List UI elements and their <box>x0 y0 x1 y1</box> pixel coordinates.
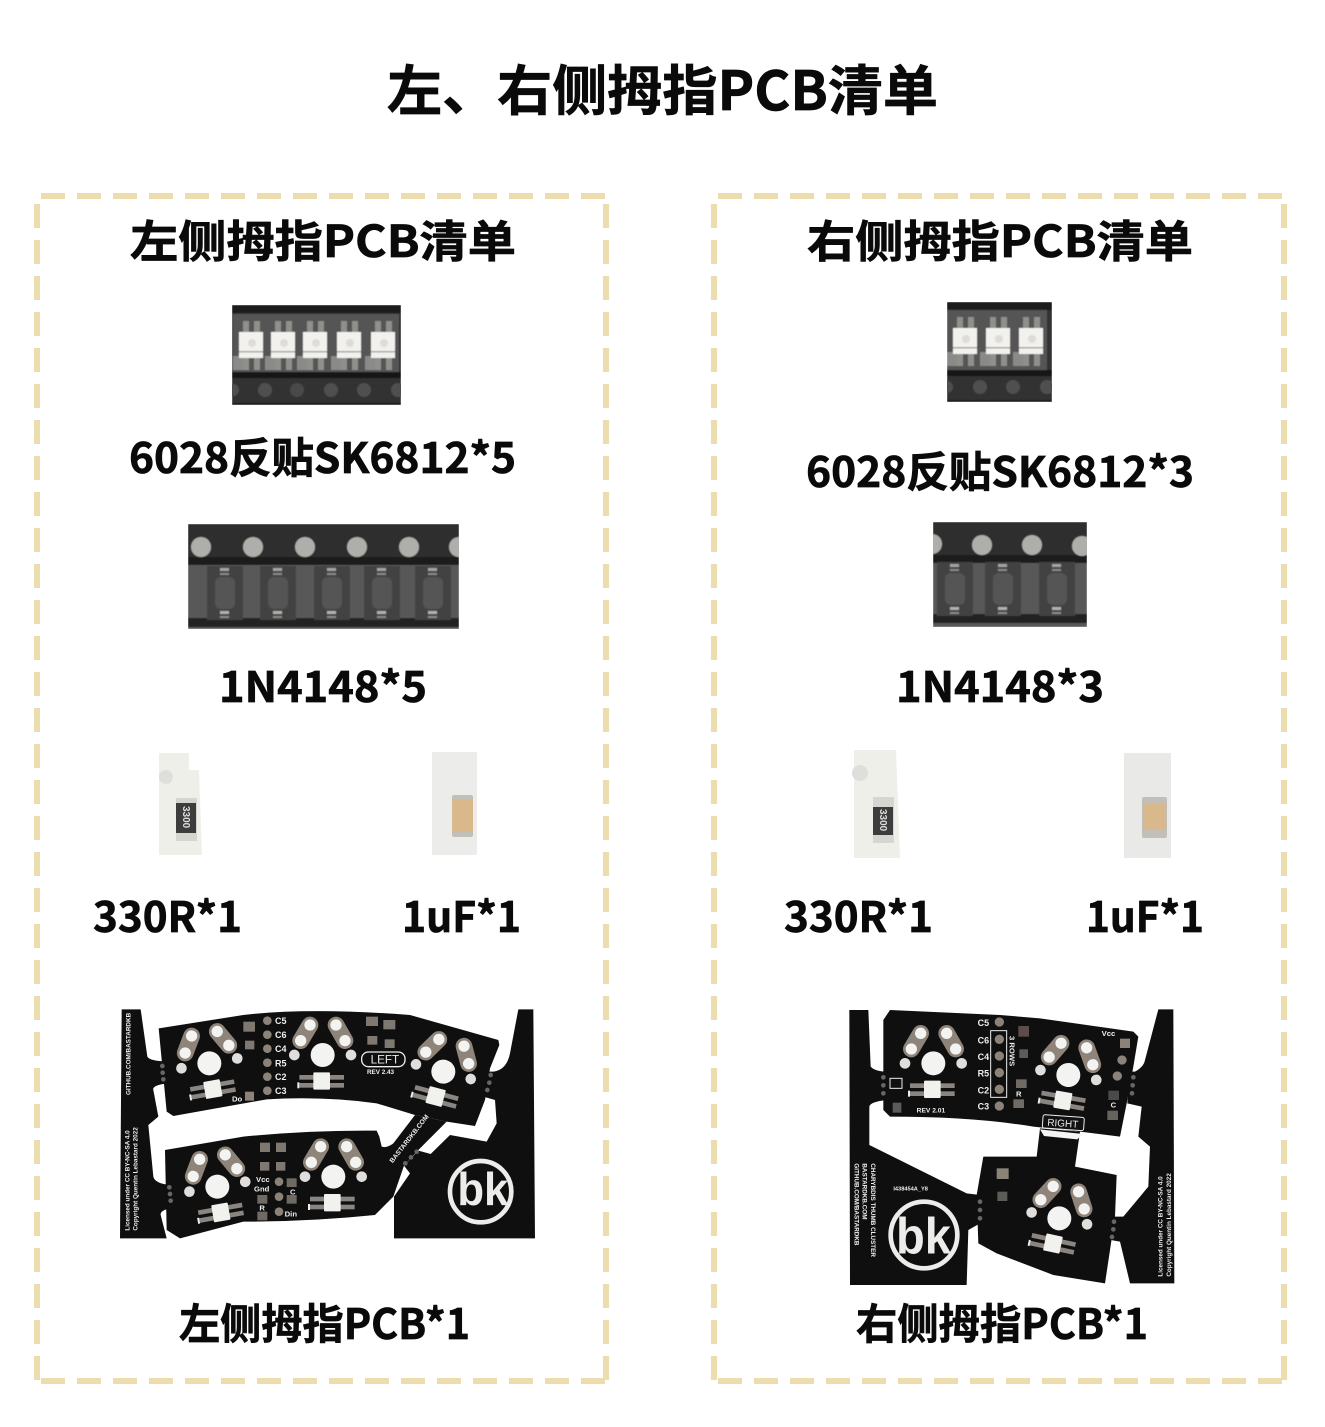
photo: left thumb PCB: Do <box>232 1094 243 1103</box>
photo: right thumb PCB: bk <box>896 1207 952 1264</box>
label: left thumb PCB x1: 左侧拇指PCB*1 <box>179 1291 470 1352</box>
label: SK6812 x3: 6028反贴SK6812*3 <box>806 439 1194 500</box>
photo: left thumb PCB: REV 2.43 <box>367 1069 395 1076</box>
photo: left thumb PCB: bk <box>457 1163 508 1215</box>
photo: right thumb PCB: Vcc <box>1102 1029 1116 1038</box>
photo: left thumb PCB: C2 <box>275 1072 286 1082</box>
photo: SK6812 tape, 3 LEDs <box>941 302 1054 402</box>
photo: left thumb PCB: C3 <box>275 1086 286 1096</box>
photo: right thumb PCB: REV 2.01 <box>917 1107 945 1114</box>
photo: right thumb PCB: C5 <box>978 1018 989 1028</box>
photo: right thumb PCB: C6 <box>978 1035 989 1045</box>
photo: right thumb PCB: 3 ROWS <box>1007 1036 1016 1066</box>
photo: left thumb PCB: BASTARDKB.COM <box>389 1113 431 1165</box>
photo: left thumb PCB: R <box>259 1204 265 1213</box>
photo: right thumb PCB: Licensed under CC BY-NC-SA 4.0 <box>1158 1176 1165 1277</box>
title: 左、右侧拇指PCB清单 <box>387 47 938 126</box>
label: 330R x1: 330R*1 <box>93 884 242 945</box>
photo: right thumb PCB: C3 <box>978 1101 989 1111</box>
photo: 1N4148 tape, 3 diodes <box>922 522 1092 627</box>
photo: left thumb PCB: Copyright Quentin Lebastard 2022 <box>133 1127 140 1231</box>
panel border: right <box>714 196 1284 1384</box>
photo: 330R resistor: 3300 <box>877 809 888 832</box>
photo: right thumb PCB: I438454A_Y8 <box>893 1187 928 1193</box>
photo: right thumb PCB: RIGHT <box>1047 1118 1079 1131</box>
label: 1N4148 x5: 1N4148*5 <box>219 654 427 715</box>
photo: left thumb PCB: LEFT <box>371 1054 399 1067</box>
photo: right thumb PCB: C4 <box>978 1052 989 1062</box>
photo: 1uF capacitor <box>432 752 477 855</box>
photo: right thumb PCB: GITHUB.COM/BASTARDKB <box>852 1163 859 1246</box>
panel: right thumb PCB list <box>714 196 1284 1384</box>
photo: left thumb PCB: C5 <box>275 1016 286 1026</box>
photo: left thumb PCB: GITHUB.COM/BASTARDKB <box>126 1012 133 1095</box>
photo: 330R resistor: 3300 <box>180 806 191 829</box>
photo: left thumb PCB: Gnd <box>254 1184 270 1193</box>
photo: left thumb PCB <box>120 1009 535 1238</box>
photo: right thumb PCB <box>849 1009 1174 1285</box>
photo: right thumb PCB: R <box>1016 1090 1022 1099</box>
photo: right thumb PCB: BASTARDKB.COM <box>861 1163 868 1219</box>
photo: 330R resistor <box>852 750 900 858</box>
photo: right thumb PCB: C2 <box>978 1085 989 1095</box>
label: 330R x1: 330R*1 <box>784 884 933 945</box>
photo: right thumb PCB: C <box>1111 1100 1117 1109</box>
photo: SK6812 tape, 5 LEDs <box>227 305 405 405</box>
photo: left thumb PCB: C6 <box>275 1030 286 1040</box>
photo: left thumb PCB: C <box>290 1188 296 1197</box>
photo: 330R resistor <box>159 753 202 855</box>
photo: right thumb PCB: R5 <box>978 1069 989 1079</box>
label: right thumb PCB x1: 右侧拇指PCB*1 <box>856 1291 1148 1352</box>
photo: left thumb PCB: R5 <box>275 1059 286 1069</box>
panel: left thumb PCB list <box>37 196 606 1384</box>
label: SK6812 x5: 6028反贴SK6812*5 <box>129 425 516 486</box>
photo: left thumb PCB: Licensed under CC BY-NC-SA 4.0 <box>124 1130 131 1231</box>
photo: right thumb PCB: Copyright Quentin Lebastard 2022 <box>1166 1173 1173 1277</box>
photo: 1N4148 tape, 5 diodes <box>188 524 469 629</box>
heading: left list: 左侧拇指PCB清单 <box>130 206 516 270</box>
label: 1uF x1: 1uF*1 <box>402 884 521 945</box>
photo: 1uF capacitor <box>1124 753 1171 858</box>
photo: left thumb PCB: Vcc <box>256 1175 270 1184</box>
photo: right thumb PCB: CHARYBDIS THUMB CLUSTER <box>869 1163 876 1257</box>
label: 1N4148 x3: 1N4148*3 <box>896 654 1104 715</box>
label: 1uF x1: 1uF*1 <box>1086 884 1204 945</box>
photo: left thumb PCB: Din <box>285 1210 297 1219</box>
photo: left thumb PCB: C4 <box>275 1044 286 1054</box>
heading: right list: 右侧拇指PCB清单 <box>807 206 1193 270</box>
panel border: left <box>37 196 606 1384</box>
